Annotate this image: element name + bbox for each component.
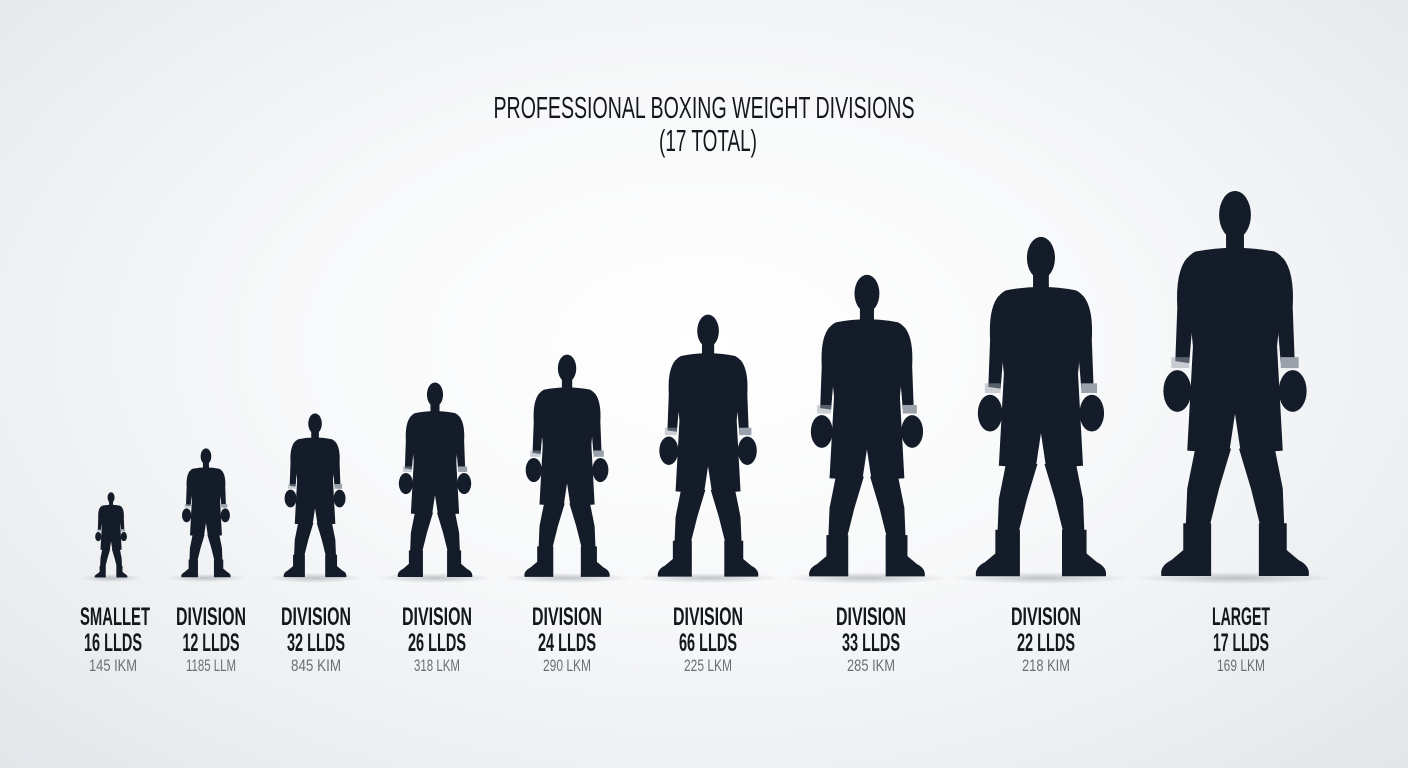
label 3: DIVISION	[281, 603, 351, 631]
label 4	[402, 603, 472, 675]
figure 3	[284, 413, 346, 577]
label 7	[836, 603, 906, 675]
label 5: 290 LKM	[543, 656, 591, 675]
label 1: 16 LLDS	[84, 629, 142, 657]
label 9: 169 LKM	[1217, 656, 1265, 675]
label 5: DIVISION	[532, 603, 602, 631]
label 1: 145 IKM	[89, 656, 137, 675]
label 4: DIVISION	[402, 603, 472, 631]
label 2: 12 LLDS	[182, 629, 240, 657]
label 5	[532, 603, 602, 675]
label 8: 218 KIM	[1022, 656, 1070, 675]
label 8	[1011, 603, 1081, 675]
label 9	[1212, 603, 1270, 675]
title	[494, 90, 914, 158]
figure 4	[398, 383, 472, 577]
label 1: SMALLET	[80, 603, 150, 631]
label 5: 24 LLDS	[538, 629, 596, 657]
label 2	[176, 603, 246, 675]
figure 2	[181, 448, 231, 577]
label 6: 66 LLDS	[679, 629, 737, 657]
figure 8	[976, 237, 1106, 576]
label 3	[281, 603, 351, 675]
figure 1: smallest boxer	[95, 492, 127, 578]
label 4: 318 LKM	[414, 656, 460, 675]
title: PROFESSIONAL BOXING WEIGHT DIVISIONS	[494, 90, 914, 125]
label 6: DIVISION	[673, 603, 743, 631]
figure 5	[524, 355, 610, 577]
label 6: 225 LKM	[684, 656, 732, 675]
figure 9: largest boxer	[1161, 191, 1309, 576]
label 9: LARGET	[1212, 603, 1270, 631]
label 3: 32 LLDS	[287, 629, 345, 657]
figure 7	[809, 275, 925, 576]
label 4: 26 LLDS	[408, 629, 466, 657]
label 2: DIVISION	[176, 603, 246, 631]
label 2: 1185 LLM	[186, 656, 236, 675]
ground shadows	[81, 572, 1335, 584]
title: (17 TOTAL)	[659, 123, 757, 158]
label 7: 285 IKM	[847, 656, 895, 675]
label 6	[673, 603, 743, 675]
figure 6	[658, 315, 758, 577]
label 3: 845 KIM	[291, 656, 341, 675]
label 7: DIVISION	[836, 603, 906, 631]
label 1	[80, 603, 150, 675]
label 8: 22 LLDS	[1017, 629, 1075, 657]
label 9: 17 LLDS	[1213, 629, 1269, 657]
label 8: DIVISION	[1011, 603, 1081, 631]
label 7: 33 LLDS	[842, 629, 900, 657]
